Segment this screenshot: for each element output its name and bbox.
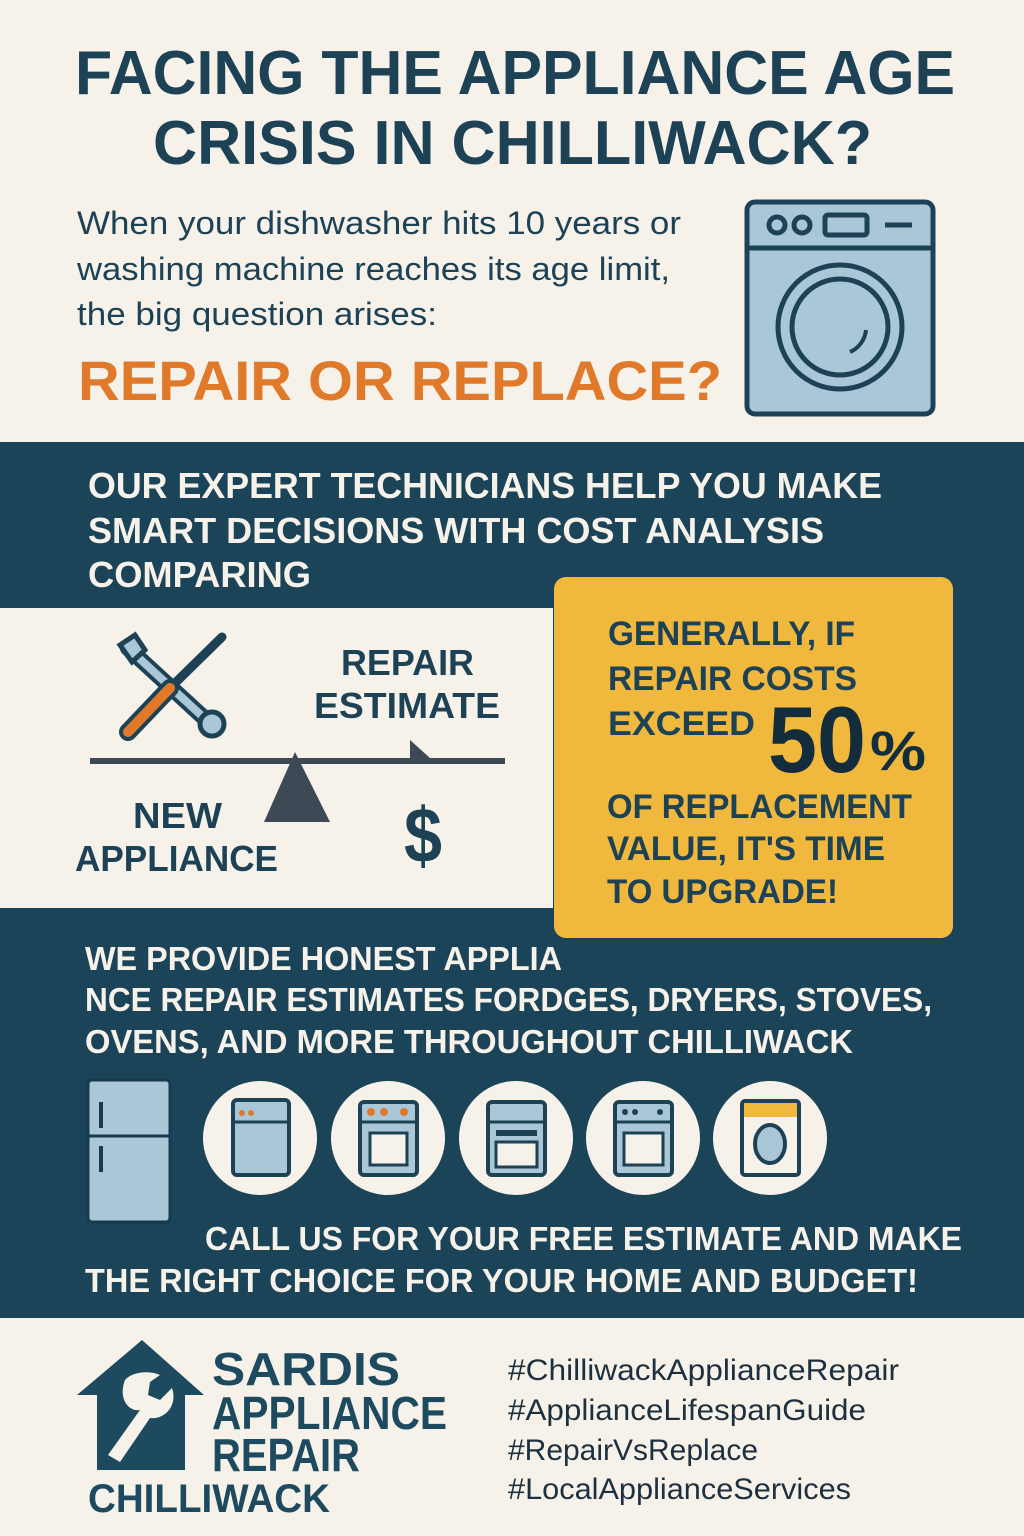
label: repair estimate (314, 642, 500, 726)
logo: APPLIANCE (212, 1387, 447, 1439)
panel: navy band (0, 442, 1024, 1318)
logo: REPAIR (212, 1429, 360, 1481)
title (75, 39, 955, 178)
services text (85, 940, 932, 1060)
call to action: THE RIGHT CHOICE FOR YOUR HOME AND BUDGET! (85, 1262, 918, 1299)
intro text: the big question arises: (77, 296, 437, 332)
callout: 50% rule: VALUE, IT'S TIME (607, 830, 885, 868)
logo: CHILLIWACK (88, 1477, 330, 1521)
callout: 50% rule: GENERALLY, IF (608, 615, 855, 653)
callout: 50% rule: OF REPLACEMENT (607, 788, 912, 826)
icon: fridge (88, 1080, 170, 1222)
hashtags (508, 1354, 899, 1506)
label: new appliance (75, 795, 278, 879)
hashtags: #ApplianceLifespanGuide (508, 1394, 866, 1427)
scale graphic (90, 740, 505, 822)
call to action: CALL US FOR YOUR FREE ESTIMATE AND MAKE (205, 1220, 962, 1257)
band text: SMART DECISIONS WITH COST ANALYSIS (88, 510, 824, 551)
intro text: When your dishwasher hits 10 years or (77, 205, 681, 241)
title: CRISIS IN CHILLIWACK? (153, 109, 872, 178)
label: repair estimate: ESTIMATE (314, 685, 500, 726)
callout: 50% rule: EXCEED (608, 705, 755, 743)
services text: NCE REPAIR ESTIMATES FORDGES, DRYERS, STOVES, (85, 981, 932, 1018)
icon: dollar: $ (404, 791, 442, 879)
icon: washing machine (747, 202, 933, 414)
logo (77, 1340, 447, 1521)
icon: tools (120, 635, 224, 736)
intro text (76, 205, 681, 332)
services text: WE PROVIDE HONEST APPLIA (85, 940, 562, 977)
callout: 50% rule: TO UPGRADE! (607, 873, 838, 911)
callout: 50% rule: % (870, 719, 926, 782)
hashtags: #ChilliwackApplianceRepair (508, 1354, 899, 1387)
call to action (85, 1220, 962, 1299)
label: repair estimate: REPAIR (341, 642, 474, 683)
hashtags: #LocalApplianceServices (508, 1473, 851, 1506)
logo: SARDIS (212, 1343, 400, 1395)
label: new appliance: NEW (133, 795, 222, 836)
title: FACING THE APPLIANCE AGE (75, 39, 955, 108)
band text: OUR EXPERT TECHNICIANS HELP YOU MAKE (88, 465, 882, 506)
hashtags: #RepairVsReplace (508, 1434, 758, 1467)
services text: OVENS, AND MORE THROUGHOUT CHILLIWACK (85, 1023, 853, 1060)
callout: 50% rule: 50 (768, 687, 866, 792)
intro text: washing machine reaches its age limit, (76, 251, 670, 287)
headline: repair or replace: REPAIR OR REPLACE? (78, 349, 722, 412)
label: new appliance: APPLIANCE (75, 838, 278, 879)
icon row: appliances (203, 1081, 827, 1195)
band text (88, 465, 882, 595)
callout: 50% rule (554, 577, 953, 938)
callout: 50% rule: REPAIR COSTS (608, 660, 857, 698)
band text: COMPARING (88, 554, 311, 595)
